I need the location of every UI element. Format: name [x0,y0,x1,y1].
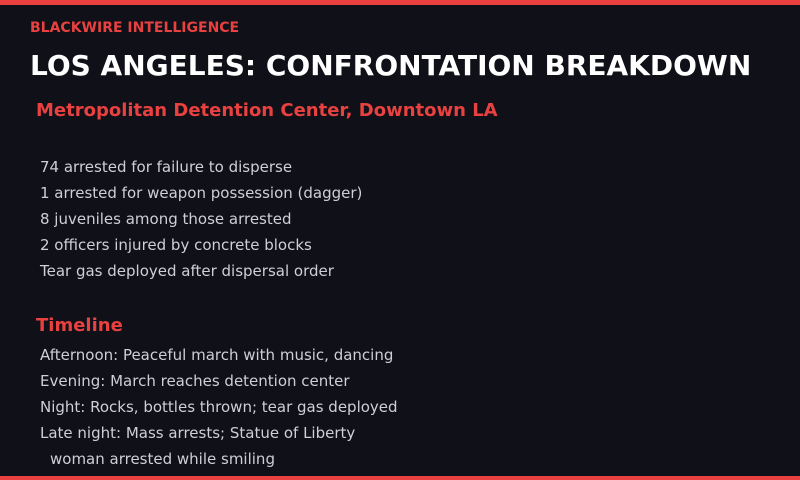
list: arrest facts: 2 officers injured by concrete blocks [40,236,312,254]
list: timeline events: Late night: Mass arrests; Statue of Liberty [40,424,355,442]
brand label: BLACKWIRE INTELLIGENCE [30,20,239,36]
list: arrest facts: 74 arrested for failure to disperse [40,158,292,176]
list: timeline events [40,346,398,468]
top accent bar [0,0,800,5]
section heading: detention center: Metropolitan Detention Center, Downtown LA [36,100,498,121]
title: LOS ANGELES: CONFRONTATION BREAKDOWN [30,49,751,82]
list: timeline events: woman arrested while smiling [50,450,275,468]
list: arrest facts: 8 juveniles among those arrested [40,210,292,228]
list: timeline events: Afternoon: Peaceful march with music, dancing [40,346,393,364]
list: timeline events: Night: Rocks, bottles thrown; tear gas deployed [40,398,398,416]
list: arrest facts: 1 arrested for weapon possession (dagger) [40,184,362,202]
list: timeline events: Evening: March reaches detention center [40,372,350,390]
bottom accent bar [0,476,800,480]
section heading: timeline: Timeline [36,315,123,336]
list: arrest facts [40,158,362,280]
list: arrest facts: Tear gas deployed after dispersal order [40,262,334,280]
